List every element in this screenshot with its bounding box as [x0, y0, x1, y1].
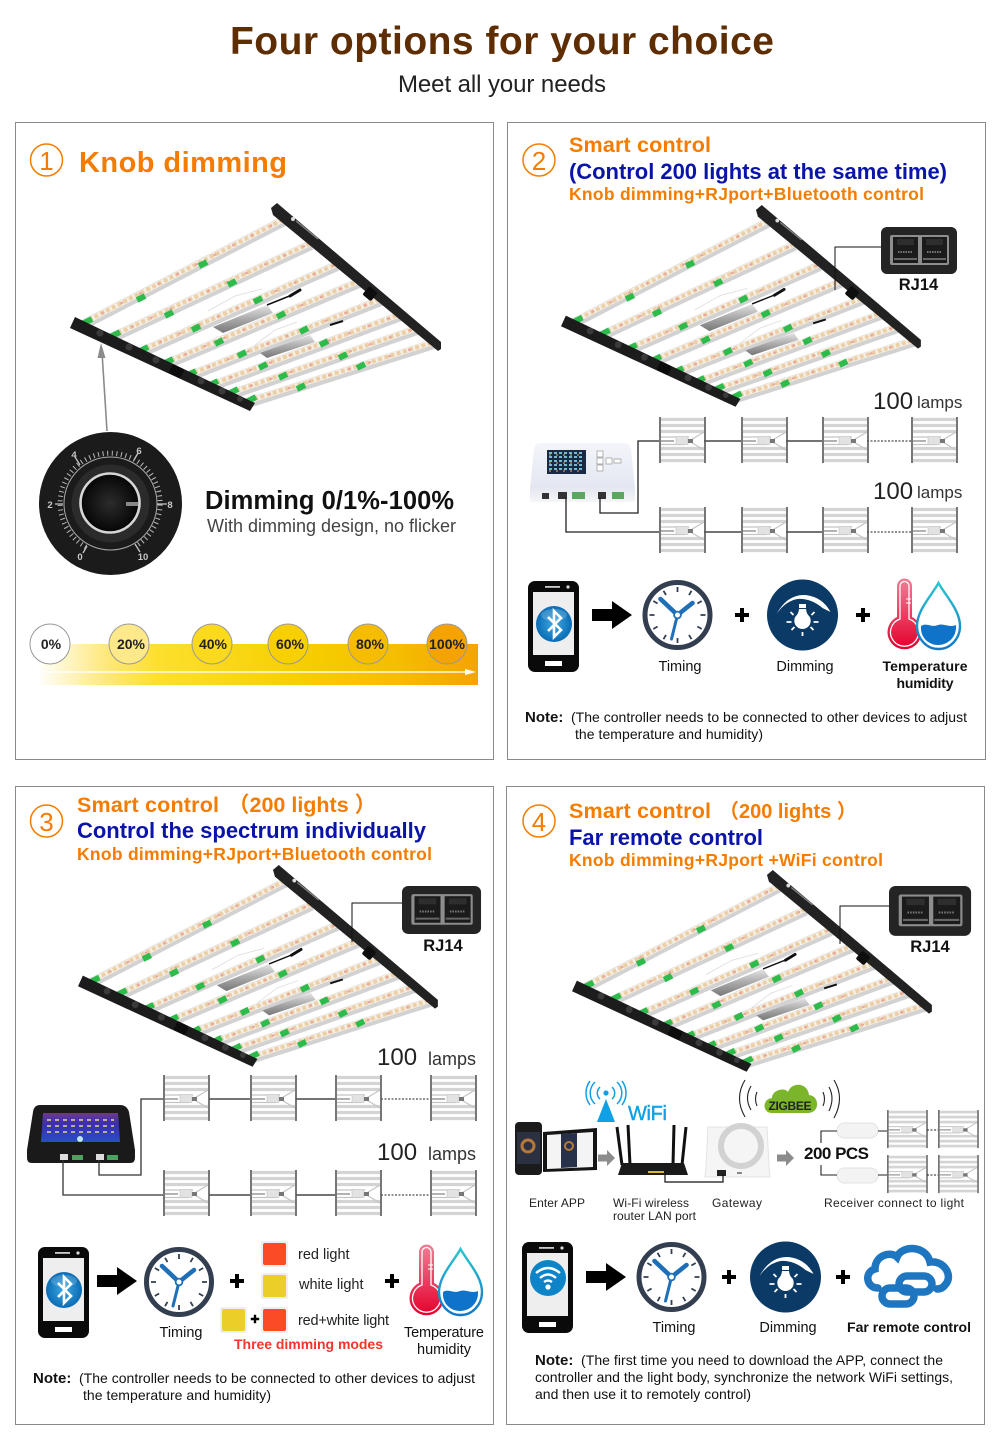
spectrum modes: red light [298, 1247, 350, 1263]
arrow [592, 601, 632, 629]
percent markers [30, 624, 467, 664]
lamp count label row 2: 100 [377, 1139, 417, 1166]
lamp chain row 2 [164, 1170, 476, 1216]
heading: Smart control [569, 799, 711, 823]
RJ14 port callout: RJ14 [423, 937, 464, 955]
controller wiring [566, 441, 659, 532]
icon: temperature and humidity [888, 578, 960, 649]
lamp count label row 2 [377, 1139, 476, 1166]
heading: Knob dimming [79, 147, 287, 179]
number badge 4 [523, 805, 555, 837]
percent markers: 0% [41, 636, 62, 652]
spectrum modes: red+white light [298, 1313, 389, 1329]
spectrum modes [220, 1241, 389, 1352]
icon: dimming bulb [767, 580, 838, 650]
network step labels: Enter APP [529, 1196, 585, 1210]
icon: dimming bulb [750, 1242, 821, 1312]
grow light product [78, 865, 438, 1067]
number badge 4: 4 [532, 807, 546, 837]
icon: clock timing [146, 1250, 212, 1314]
heading: （200 lights ） [719, 800, 857, 823]
plus sign [735, 608, 749, 622]
dimming knob: 6 [136, 446, 142, 457]
dimming headline: Dimming 0/1%-100% [205, 487, 454, 515]
heading [77, 793, 432, 864]
heading: Smart control [77, 793, 219, 817]
feature labels: Temperature [404, 1325, 484, 1341]
icon: phone with bluetooth [38, 1247, 89, 1338]
feature labels: Timing [659, 659, 701, 675]
plus sign [230, 1274, 244, 1288]
percent markers: 20% [117, 636, 146, 652]
subtitle: Meet all your needs [398, 71, 606, 98]
dimming knob: 10 [138, 552, 148, 563]
dimming knob: 0 [77, 552, 83, 563]
dimming gradient bar [37, 644, 478, 685]
spectrum modes: white light [298, 1277, 363, 1293]
RJ14 port callout [840, 886, 971, 956]
heading: (Control 200 lights at the same time) [569, 159, 947, 184]
note: the temperature and humidity) [575, 726, 763, 742]
lamp count label row 1: lamps [917, 393, 962, 412]
feature labels: humidity [417, 1342, 472, 1358]
lamp count label row 2: lamps [428, 1144, 476, 1164]
lamp chain row 2 [660, 507, 957, 553]
note: (The controller needs to be connected to other devices to adjust [571, 709, 967, 725]
title: Four options for your choice [230, 20, 774, 63]
percent markers: 100% [429, 636, 466, 652]
feature labels [160, 1325, 484, 1358]
network step labels: router LAN port [613, 1209, 697, 1223]
number badge 2 [523, 144, 555, 176]
dimming subtext: With dimming design, no flicker [207, 516, 456, 536]
heading: Control the spectrum individually [77, 818, 427, 843]
lamp count label row 1 [873, 388, 962, 415]
dimming knob: 4 [71, 450, 77, 461]
panel frame [506, 786, 984, 1424]
lamp chain row 1 [660, 417, 957, 463]
note: (The first time you need to download the APP, connect the [581, 1352, 943, 1368]
heading: Smart control [569, 133, 711, 157]
number badge 2: 2 [532, 146, 546, 176]
icon: cloud link [868, 1249, 948, 1304]
grow light product [572, 870, 932, 1072]
panel 1: knob dimming [16, 122, 494, 760]
lamp count label row 2 [873, 478, 962, 505]
feature labels: Dimming [759, 1320, 817, 1336]
lamp count label row 1: 100 [377, 1044, 417, 1071]
RJ14 port callout: RJ14 [910, 938, 951, 956]
network step labels: Gateway [712, 1196, 762, 1210]
RJ14 port callout [835, 227, 957, 294]
receivers [821, 1123, 887, 1183]
icon: phone with wifi [522, 1242, 573, 1333]
note: Note: [525, 709, 563, 726]
panel frame [508, 122, 986, 760]
panel 2: smart control [508, 122, 986, 760]
heading: （200 lights ） [228, 793, 376, 817]
note: controller and the light body, synchronize the network WiFi settings, [535, 1369, 953, 1385]
plus sign [856, 608, 870, 622]
icon: clock timing [645, 582, 710, 648]
note [535, 1352, 953, 1402]
plus sign [836, 1270, 850, 1284]
percent markers: 40% [199, 636, 228, 652]
percent markers: 80% [356, 636, 385, 652]
feature labels [659, 658, 968, 691]
network step labels: Receiver connect to light [824, 1196, 965, 1210]
heading: Far remote control [569, 825, 763, 850]
grow light product [70, 203, 441, 411]
lamp count label row 2: lamps [917, 483, 962, 502]
note: (The controller needs to be connected to other devices to adjust [79, 1370, 475, 1386]
note: the temperature and humidity) [83, 1387, 271, 1403]
zigbee cloud: ZIGBEE [768, 1099, 812, 1113]
white controller [530, 443, 635, 502]
router [617, 1125, 688, 1175]
heading: Knob dimming+RJport +WiFi control [569, 850, 883, 870]
lamp count label row 1: lamps [428, 1049, 476, 1069]
arrow from knob to light [98, 343, 107, 431]
gateway [705, 1126, 770, 1177]
note: Note: [33, 1370, 71, 1387]
RJ14 port callout: RJ14 [899, 276, 939, 294]
heading: Knob dimming+RJport+Bluetooth control [569, 184, 924, 204]
dimming knob: 8 [167, 500, 173, 511]
lamp grid [888, 1110, 978, 1193]
note: and then use it to remotely control) [535, 1386, 751, 1402]
WiFi signal icon: WiFi [628, 1103, 667, 1125]
zigbee cloud [740, 1080, 840, 1118]
note [33, 1370, 475, 1403]
percent markers: 60% [276, 636, 305, 652]
lamp chain row 1 [164, 1075, 476, 1121]
number badge 1 [30, 144, 62, 176]
feature labels: Far remote control [847, 1319, 971, 1335]
plus sign [385, 1274, 399, 1288]
dimming knob [39, 432, 182, 575]
note [525, 709, 967, 742]
grow light product [561, 205, 921, 407]
controller wiring [63, 1099, 163, 1195]
feature labels: humidity [896, 675, 954, 691]
lamp count label row 2: 100 [873, 478, 913, 505]
panel 4: far remote control [506, 786, 984, 1424]
dimming knob: 2 [47, 500, 53, 511]
lamp count label row 1: 100 [873, 388, 913, 415]
router to gateway cable [665, 1174, 723, 1182]
arrow [586, 1263, 626, 1291]
arrow [598, 1150, 615, 1166]
icon: temperature and humidity [410, 1244, 482, 1315]
arrow [97, 1267, 137, 1295]
lamp count label row 1 [377, 1044, 476, 1071]
panel 3: spectrum control [16, 786, 494, 1424]
panel frame [16, 122, 494, 760]
panel frame [16, 786, 494, 1424]
plus sign [722, 1270, 736, 1284]
feature labels: Temperature [882, 658, 968, 674]
RJ14 port callout [352, 886, 481, 955]
count label: 200 PCS [804, 1144, 869, 1163]
number badge 1: 1 [39, 146, 54, 176]
feature labels: Timing [160, 1325, 202, 1341]
network step labels: Wi-Fi wireless [613, 1196, 689, 1210]
feature labels: Timing [653, 1320, 695, 1336]
network step labels [529, 1196, 965, 1223]
feature labels: Dimming [776, 659, 834, 675]
number badge 3 [30, 805, 62, 837]
heading: Knob dimming+RJport+Bluetooth control [77, 844, 432, 864]
spectrum modes: Three dimming modes [234, 1336, 383, 1352]
WiFi signal icon [586, 1081, 667, 1125]
note: Note: [535, 1352, 573, 1369]
number badge 3: 3 [39, 807, 54, 837]
app devices [515, 1122, 597, 1175]
feature labels [653, 1319, 971, 1336]
icon: clock timing [639, 1244, 704, 1310]
heading [569, 799, 883, 870]
heading [569, 133, 947, 204]
icon: phone with bluetooth [528, 581, 579, 672]
arrow [777, 1150, 794, 1166]
black controller [27, 1105, 135, 1163]
